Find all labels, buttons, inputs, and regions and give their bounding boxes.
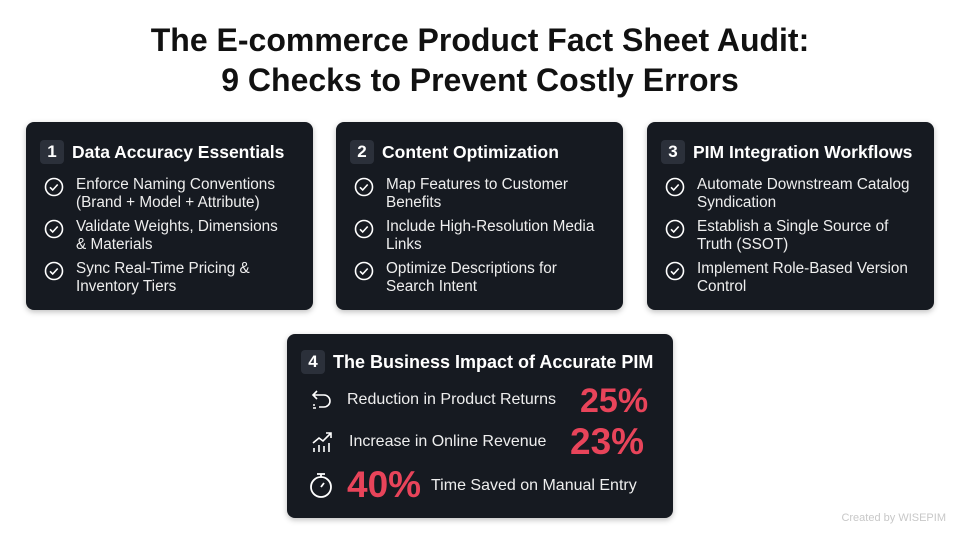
heading 2: Content Optimization [382,142,559,162]
item 1b: & Materials [76,236,153,252]
title: The E-commerce Product Fact Sheet Audit: [151,22,809,58]
item 1a [44,176,275,210]
item 3a: Automate Downstream Catalog [697,176,910,193]
stat: 23%: 23% [570,421,644,462]
item 3b: Truth (SSOT) [697,236,788,252]
item 3b: Establish a Single Source of [697,218,888,235]
item 2a: Map Features to Customer [386,176,568,193]
stat: returns label: Reduction in Product Returns [347,391,556,408]
heading 2: 2 [357,142,367,161]
panel: PIM integration [647,122,934,310]
item 2c: Search Intent [386,278,477,294]
heading 1: Data Accuracy Essentials [72,142,284,162]
item 3c: Implement Role-Based Version [697,260,908,277]
item 2c [354,260,557,294]
panel: business impact [287,334,673,518]
panel: content optimization [336,122,623,310]
item 2b [354,218,594,252]
item 1c [44,260,250,294]
item 1c: Inventory Tiers [76,278,176,294]
item 1a: Enforce Naming Conventions [76,176,275,193]
item 3b [666,218,888,252]
item 3a [666,176,910,210]
item 2a: Benefits [386,194,441,210]
item 1a: (Brand + Model + Attribute) [76,194,260,210]
stat: 40%: 40% [347,464,421,505]
item 3c: Control [697,278,746,294]
item 1b [44,218,278,252]
stat: 25%: 25% [580,382,648,420]
heading 3: 3 [668,142,678,161]
title: 9 Checks to Prevent Costly Errors [221,62,739,98]
panel: data accuracy [26,122,313,310]
heading 1: 1 [47,142,57,161]
heading 4: 4 [308,352,318,371]
credit: Created by WISEPIM [841,512,946,524]
stat: revenue label: Increase in Online Revenue [349,433,546,450]
icon: stopwatch [310,473,332,498]
heading 4: The Business Impact of Accurate PIM [333,352,653,372]
item 3c [666,260,908,294]
icon: returns [312,390,331,409]
title [151,22,809,98]
item 2b: Include High-Resolution Media [386,218,594,235]
icon: revenue chart [312,432,332,452]
item 1b: Validate Weights, Dimensions [76,218,278,235]
item 3a: Syndication [697,194,776,210]
item 2b: Links [386,236,422,252]
heading 3: PIM Integration Workflows [693,142,912,162]
item 2c: Optimize Descriptions for [386,260,557,277]
item 2a [354,176,568,210]
stat: time label: Time Saved on Manual Entry [431,477,637,494]
item 1c: Sync Real-Time Pricing & [76,260,250,277]
